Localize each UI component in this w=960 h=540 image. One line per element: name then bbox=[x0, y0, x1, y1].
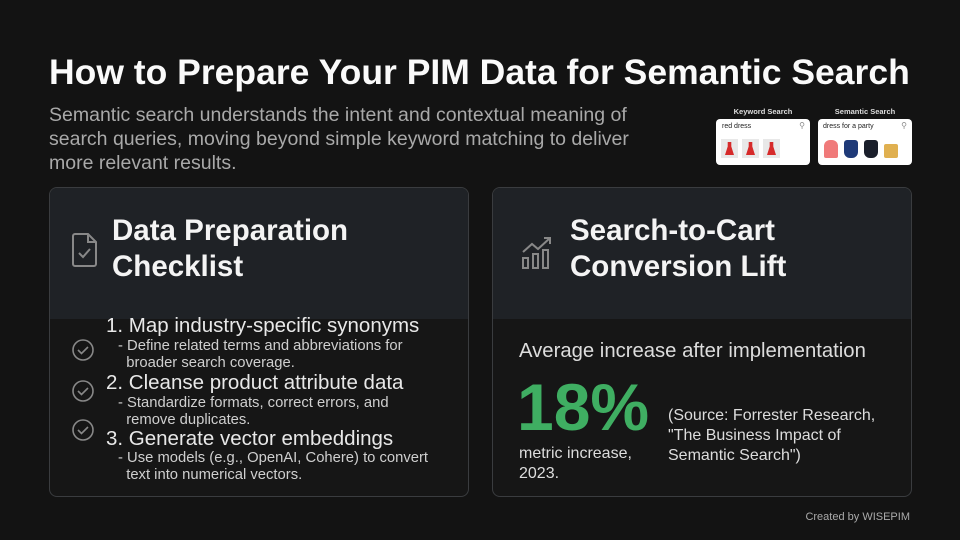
metric block bbox=[517, 340, 875, 482]
illustration: keyword vs semantic search: red dress bbox=[722, 123, 751, 130]
illustration: keyword vs semantic search: dress for a party bbox=[823, 123, 874, 130]
metric block: 2023. bbox=[519, 465, 559, 482]
checklist items: remove duplicates. bbox=[126, 412, 250, 428]
title: How to Prepare Your PIM Data for Semantic Search bbox=[49, 52, 910, 92]
metric block: Semantic Search") bbox=[668, 447, 801, 464]
illustration: keyword vs semantic search: ⚲ bbox=[799, 121, 805, 130]
icon: bar chart trend bbox=[522, 237, 551, 269]
heading bbox=[112, 214, 348, 283]
checklist items: 3. Generate vector embeddings bbox=[106, 427, 393, 450]
illustration: keyword vs semantic search bbox=[716, 107, 912, 165]
checklist items: - Use models (e.g., OpenAI, Cohere) to convert bbox=[118, 450, 428, 466]
checklist items: - Define related terms and abbreviations for bbox=[118, 338, 403, 354]
heading: Checklist bbox=[112, 250, 243, 283]
checklist items: 2. Cleanse product attribute data bbox=[106, 371, 403, 394]
panel: data preparation checklist bbox=[49, 187, 469, 497]
metric block: (Source: Forrester Research, bbox=[668, 407, 875, 424]
checklist items bbox=[72, 314, 428, 483]
heading bbox=[570, 214, 786, 283]
illustration: keyword vs semantic search: Semantic Search bbox=[835, 107, 895, 116]
illustration: keyword vs semantic search: ⚲ bbox=[901, 121, 907, 130]
metric block: Average increase after implementation bbox=[519, 340, 866, 362]
footer credit: Created by WISEPIM bbox=[805, 511, 910, 523]
checklist items: broader search coverage. bbox=[126, 355, 295, 371]
panel: search-to-cart conversion lift bbox=[492, 187, 912, 497]
subtitle text: Semantic search understands the intent and contextual meaning of search queries, moving beyond simple keyword matching to deliver more relevant results. bbox=[49, 104, 629, 174]
checklist items: text into numerical vectors. bbox=[126, 467, 302, 483]
metric block: 18% bbox=[517, 370, 649, 444]
illustration: keyword vs semantic search: Keyword Search bbox=[734, 107, 792, 116]
heading: Conversion Lift bbox=[570, 250, 786, 283]
checklist items: 1. Map industry-specific synonyms bbox=[106, 314, 419, 337]
heading: Data Preparation bbox=[112, 214, 348, 247]
metric block: metric increase, bbox=[519, 445, 632, 462]
icon: document check bbox=[72, 233, 97, 267]
checklist items: - Standardize formats, correct errors, and bbox=[118, 395, 389, 411]
heading: Search-to-Cart bbox=[570, 214, 775, 247]
metric block: "The Business Impact of bbox=[668, 427, 841, 444]
